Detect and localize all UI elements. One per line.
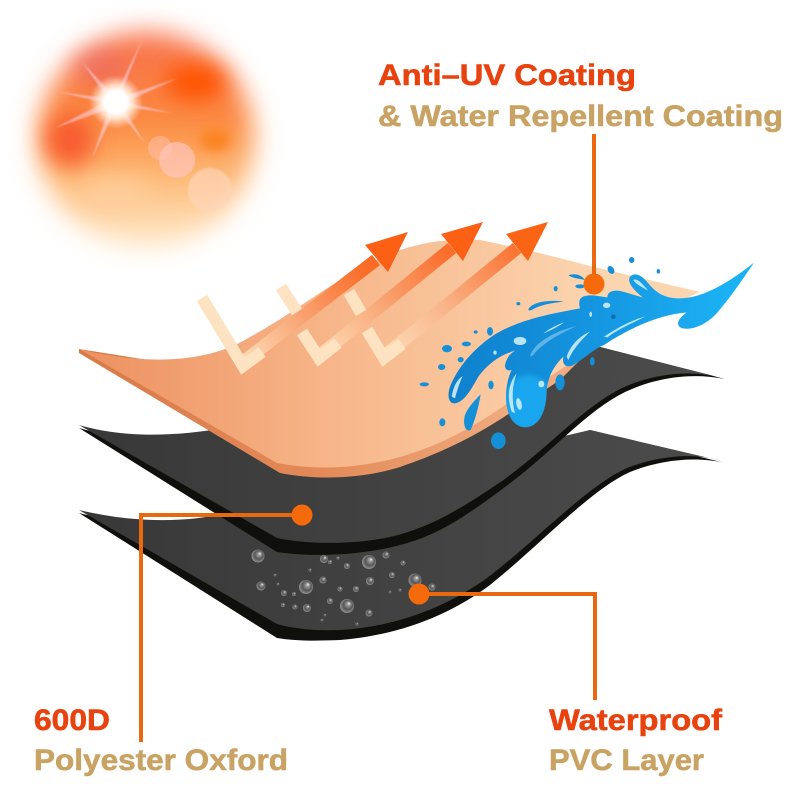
heading: anti-UV coating label: Anti–UV Coating [378,59,636,92]
heading: PVC layer label: PVC Layer [549,744,704,777]
water droplets [420,257,660,449]
water beads on PVC sheet [252,550,436,626]
heat arrows reflecting off the sheet [202,222,548,366]
callout: polyester oxford leader [141,504,312,742]
heading: polyester oxford label: 600D [34,704,110,737]
callout: PVC layer leader [408,584,595,700]
water splash [420,257,754,449]
arrow 3 [349,222,548,358]
heading: anti-UV coating label: & Water Repellent Coating [378,100,783,133]
heading: PVC layer label [549,704,723,777]
heading: polyester oxford label [34,704,288,777]
heading: polyester oxford label: Polyester Oxford [34,744,288,777]
star rays [55,38,178,158]
sun with lens flare [38,32,254,248]
callout: anti-UV coating leader [584,134,604,294]
arrow 1 [202,232,408,366]
layer: coated top sheet [79,239,700,478]
lens flares [148,136,232,212]
heading: PVC layer label: Waterproof [549,704,723,737]
heading: anti-UV coating label [378,59,783,133]
layer: polyester oxford sheet (middle) [79,347,725,555]
splash highlights [452,279,648,413]
arrow 2 [281,222,483,358]
lighter lower lobe [506,374,548,428]
layer: PVC sheet (bottom) [79,430,725,641]
